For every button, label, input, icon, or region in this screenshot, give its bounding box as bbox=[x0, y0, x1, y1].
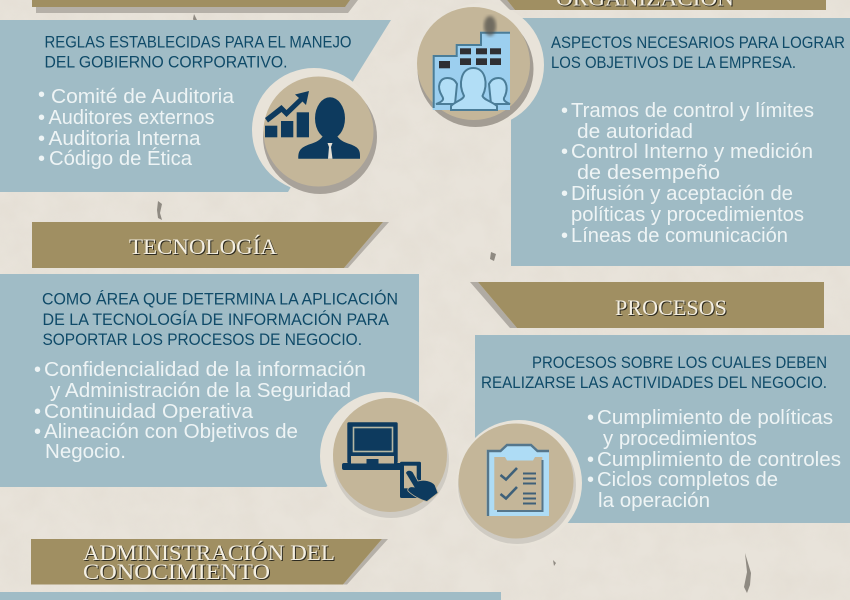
banner: procesos bbox=[470, 282, 824, 328]
panel heading text: SOPORTAR LOS PROCESOS DE NEGOCIO. bbox=[42, 331, 362, 349]
bullet list: • bbox=[34, 359, 41, 381]
banner: administración del conocimiento bbox=[31, 539, 388, 584]
bullet list: Difusión y aceptación de bbox=[571, 183, 793, 205]
panel: tecnología bbox=[0, 274, 419, 487]
panel heading text: COMO ÁREA QUE DETERMINA LA APLICACIÓN bbox=[42, 290, 398, 308]
panel: organización bbox=[511, 18, 850, 266]
bullet list: Auditoria Interna bbox=[48, 128, 201, 150]
bullet list: y Administración de la Seguridad bbox=[50, 380, 351, 402]
banner title: PROCESOS bbox=[615, 295, 727, 320]
bullet list: • bbox=[34, 401, 41, 423]
banner title bbox=[83, 540, 335, 584]
bullet list: de desempeño bbox=[577, 162, 720, 184]
panel heading text bbox=[551, 34, 845, 72]
icon: laptop and tablet bbox=[320, 392, 449, 520]
banner title: CONOCIMIENTO bbox=[83, 559, 270, 584]
panel heading text: LOS OBJETIVOS DE LA EMPRESA. bbox=[551, 54, 796, 72]
bullet list: de autoridad bbox=[577, 121, 693, 143]
bullet list: • bbox=[38, 128, 45, 150]
panel heading text bbox=[481, 354, 827, 392]
panel heading text: REGLAS ESTABLECIDAS PARA EL MANEJO bbox=[44, 34, 352, 52]
bullet list: • bbox=[38, 107, 45, 129]
panel heading text bbox=[42, 290, 398, 349]
bullet list: Líneas de comunicación bbox=[571, 225, 788, 247]
bullet list: Cumplimiento de políticas bbox=[597, 407, 833, 429]
banner: tecnología bbox=[32, 222, 389, 268]
bullet list: Continuidad Operativa bbox=[44, 401, 254, 423]
bullet list: • bbox=[561, 100, 568, 122]
bullet list: Comité de Auditoria bbox=[51, 86, 235, 108]
bullet list: • bbox=[38, 84, 45, 106]
panel: procesos bbox=[475, 335, 850, 523]
bullet list bbox=[38, 84, 235, 170]
banner: organización (cropped) bbox=[500, 0, 826, 10]
bullet list bbox=[587, 407, 841, 512]
bullet list: • bbox=[587, 469, 594, 491]
banner title: ADMINISTRACIÓN DEL bbox=[83, 540, 335, 565]
bullet list: • bbox=[34, 421, 41, 443]
panel heading text: DE LA TECNOLOGÍA DE INFORMACIÓN PARA bbox=[42, 310, 389, 329]
banner: top left (cropped) bbox=[32, 0, 358, 13]
icon: building and people bbox=[417, 3, 544, 127]
bullet list: • bbox=[561, 225, 568, 247]
bullet list: • bbox=[561, 141, 568, 163]
bullet list: Auditores externos bbox=[48, 107, 214, 129]
panel heading text bbox=[44, 34, 352, 72]
bullet list: Control Interno y medición bbox=[571, 141, 813, 163]
banner title: TECNOLOGÍA bbox=[129, 234, 277, 259]
bullet list: Alineación con Objetivos de bbox=[44, 421, 298, 443]
bullet list: políticas y procedimientos bbox=[571, 204, 804, 226]
bullet list bbox=[34, 359, 366, 463]
bullet list: • bbox=[587, 449, 594, 471]
bullet list: Confidencialidad de la información bbox=[44, 359, 366, 381]
panel: administración del conocimiento (cropped) bbox=[0, 592, 501, 600]
panel heading text: DEL GOBIERNO CORPORATIVO. bbox=[44, 54, 288, 72]
icon: clipboard checklist bbox=[456, 420, 582, 546]
bullet list: Cumplimiento de controles bbox=[597, 449, 841, 471]
bullet list: la operación bbox=[598, 490, 710, 512]
bullet list: Código de Ética bbox=[49, 147, 193, 170]
bullet list: • bbox=[561, 183, 568, 205]
panel heading text: REALIZARSE LAS ACTIVIDADES DEL NEGOCIO. bbox=[481, 374, 827, 392]
bullet list bbox=[561, 100, 814, 247]
icon: executive with growth chart bbox=[252, 68, 377, 194]
bullet list: Negocio. bbox=[45, 441, 126, 463]
bullet list: • bbox=[587, 407, 594, 429]
bullet list: Tramos de control y límites bbox=[571, 100, 814, 122]
bullet list: Ciclos completos de bbox=[597, 469, 778, 491]
panel: gobierno corporativo bbox=[0, 20, 391, 192]
bullet list: • bbox=[38, 148, 45, 170]
panel heading text: PROCESOS SOBRE LOS CUALES DEBEN bbox=[532, 354, 827, 372]
bullet list: y procedimientos bbox=[603, 428, 757, 450]
